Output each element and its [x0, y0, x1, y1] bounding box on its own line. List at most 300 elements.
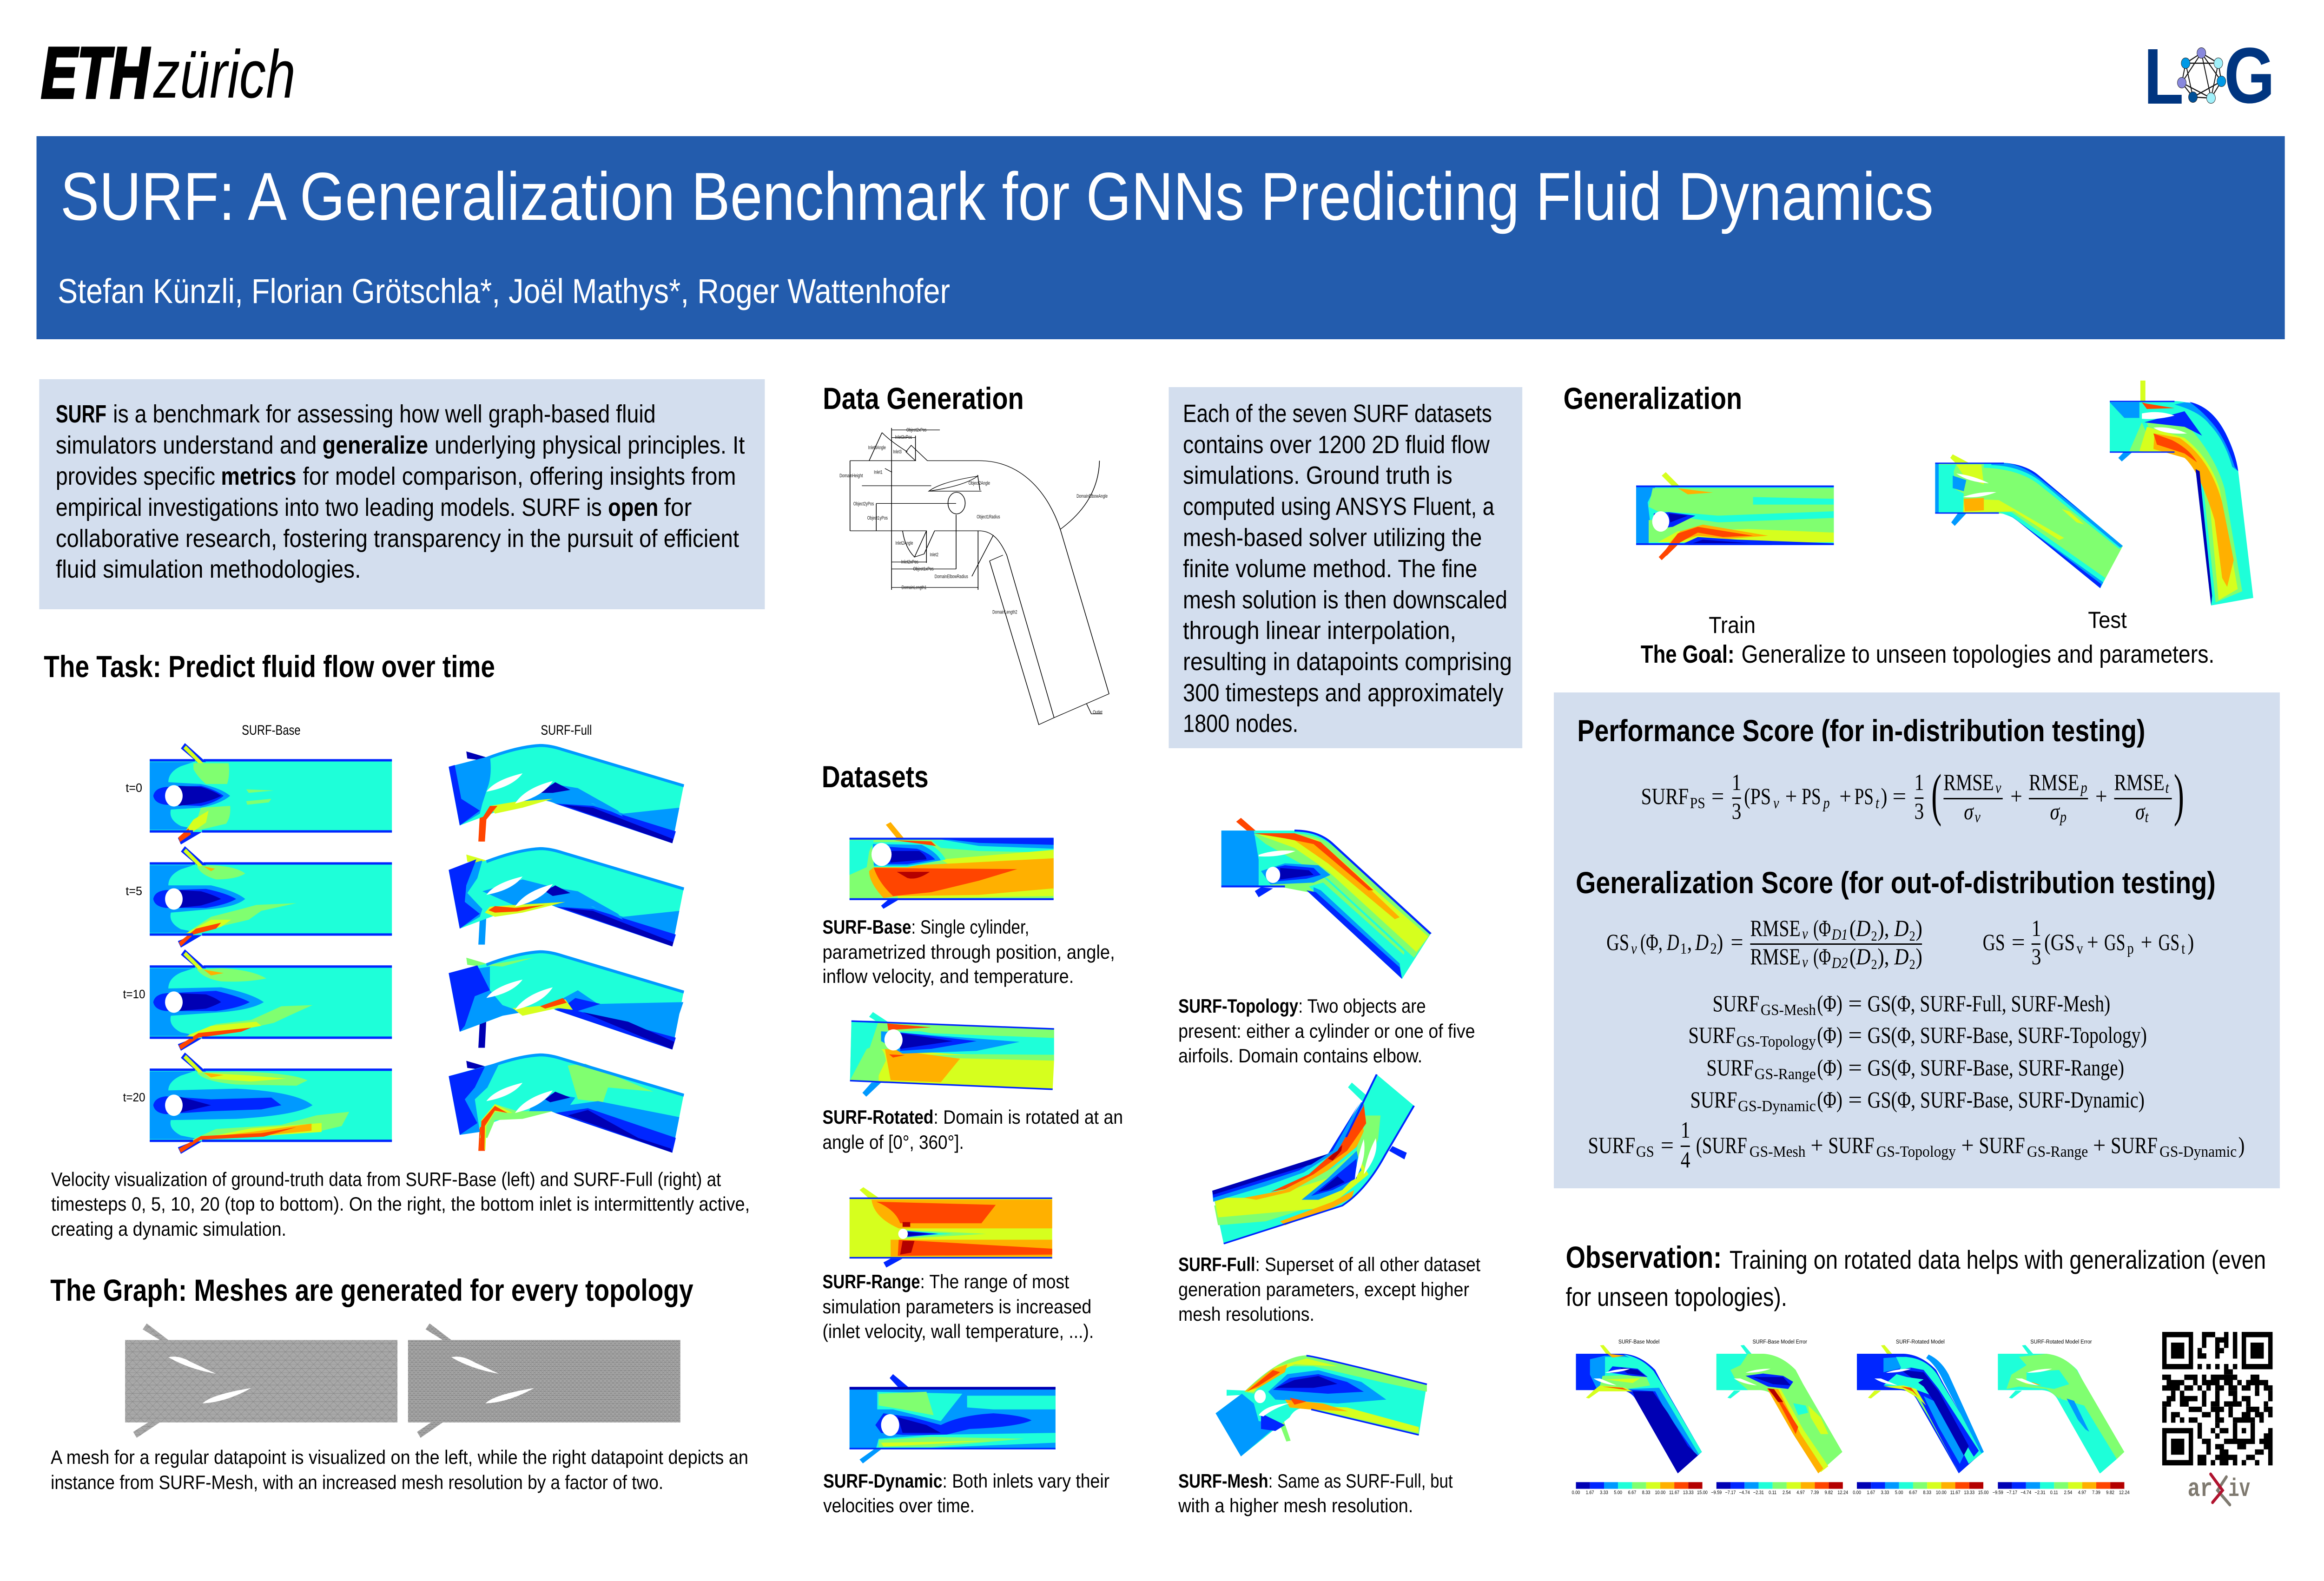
formula: GS mean	[1983, 915, 2194, 969]
formula: performance score: 3	[1732, 798, 1741, 824]
figure: observation plots: SURF-Rotated Model	[1896, 1339, 1945, 1345]
panel: dataset description: 1800 nodes.	[1183, 710, 1298, 738]
formula: GS-Topology: GS-Topology	[1736, 1032, 1816, 1050]
figure: dataset plots lower	[850, 1012, 1427, 1463]
formula: GS ratio: ,	[1687, 929, 1692, 955]
text: SURF-Base: : Single cylinder,	[911, 916, 1029, 938]
formula: performance score: t	[1875, 794, 1880, 812]
text: SURF-Mesh: SURF-Mesh	[1178, 1470, 1268, 1492]
plot: SURF-Rotated error	[1998, 1345, 2124, 1473]
formula: performance score: v	[1773, 794, 1779, 812]
formula: GS-Topology: (Φ)	[1817, 1022, 1842, 1048]
formula: performance score: RMSE	[2029, 769, 2079, 795]
text: SURF-Mesh: with a higher mesh resolution.	[1178, 1495, 1413, 1517]
figure: observation plots: 0.00	[1853, 1490, 1861, 1495]
formula: GS ratio: D2	[1831, 954, 1848, 972]
text: SURF-Mesh	[1178, 1470, 1453, 1517]
figure: observation plots: 1.67	[1586, 1490, 1594, 1495]
formula: GS mean: (GS	[2044, 929, 2075, 955]
formula: GS ratio: GS	[1606, 929, 1629, 955]
panel: introduction: for model comparison, offering insights from	[303, 462, 736, 490]
formula: SURF GS: GS-Mesh	[1750, 1142, 1806, 1160]
diagram: domain parametrization: Outlet	[1093, 709, 1103, 715]
formula: GS mean: +	[2141, 929, 2152, 955]
formula: performance score: +	[1785, 783, 1797, 809]
logo: LOG	[2144, 32, 2275, 121]
text: SURF-Topology: present: either a cylinder or one of five	[1178, 1021, 1475, 1042]
diagram: domain parametrization	[839, 427, 1109, 725]
formula: GS-Dynamic: =	[1848, 1087, 1862, 1113]
formula: GS ratio: D1	[1831, 925, 1848, 943]
formula: SURF GS: +	[1961, 1132, 1974, 1158]
formula: performance score: σ	[1964, 798, 1974, 824]
figure: observation plots: SURF-Rotated Model Error	[2030, 1339, 2092, 1345]
formula: GS ratio: D	[1695, 929, 1709, 955]
formula: GS-Topology	[1688, 1022, 2147, 1050]
formula: performance score: +	[2095, 783, 2107, 809]
diagram: domain parametrization: Object2Angle	[969, 480, 990, 486]
formula: performance score: =	[1711, 783, 1724, 809]
formula: performance score: PS	[1855, 783, 1874, 809]
figure: observation plots: 1.67	[1867, 1490, 1875, 1495]
plot: train	[1636, 472, 1834, 560]
figure: observation plots: 15.00	[1978, 1490, 1989, 1495]
diagram: domain parametrization: DomainElbowAngle	[1076, 493, 1108, 499]
panel: dataset description: Each of the seven SURF datasets	[1183, 400, 1492, 428]
label: train: Train	[1709, 612, 1756, 638]
text: SURF-Topology: SURF-Topology	[1178, 995, 1299, 1017]
text: SURF-Range	[822, 1271, 1094, 1343]
logo: arXiv: iv	[2228, 1475, 2250, 1504]
diagram: domain parametrization: Inlet1	[874, 469, 883, 475]
formula: SURF GS: +	[1810, 1132, 1823, 1158]
figure: observation plots	[1572, 1339, 2130, 1495]
figure: observation plots: 5.00	[1895, 1490, 1903, 1495]
panel: introduction: open	[608, 494, 658, 521]
formula: GS mean: )	[2187, 929, 2194, 955]
formula: performance score: PS	[1802, 783, 1821, 809]
panel: introduction: metrics	[221, 462, 297, 490]
plot: SURF-Mesh	[1215, 1355, 1427, 1456]
panel: header	[37, 136, 2285, 339]
diagram: domain parametrization: Inlet2xPos	[901, 559, 918, 565]
text: SURF-Full: SURF-Full	[1178, 1254, 1255, 1276]
diagram: domain parametrization: DomainLength2	[992, 609, 1017, 615]
plot: SURF-Base t=20	[150, 1053, 392, 1154]
formula: GS-Mesh: GS(Φ, SURF-Full, SURF-Mesh)	[1868, 990, 2110, 1016]
figure: observation plots: 13.33	[1683, 1490, 1694, 1495]
figure: task flow frames	[123, 722, 684, 1154]
plot: SURF-Base t=10	[150, 949, 392, 1051]
formula: GS ratio	[1606, 915, 1922, 972]
formula: GS-Mesh: GS-Mesh	[1761, 1001, 1816, 1019]
heading: generalization: Generalization	[1564, 381, 1742, 415]
logo: LOG: L	[2144, 33, 2184, 121]
formula: performance score: +	[1839, 783, 1851, 809]
logo: ETH Zurich	[41, 33, 296, 113]
formula: GS-Dynamic: GS-Dynamic	[1738, 1097, 1816, 1115]
figure: task flow frames: t=5	[125, 884, 142, 898]
formula: performance score: 3	[1915, 798, 1924, 824]
figure: observation plots: −7.17	[2007, 1490, 2017, 1495]
formula: GS ratio: RMSE	[1750, 915, 1801, 941]
formula: SURF GS: 4	[1681, 1146, 1690, 1173]
formula: GS-Mesh	[1712, 990, 2110, 1019]
diagram: domain parametrization: Inlet2	[930, 552, 938, 558]
formula: performance score: σ	[2135, 798, 2146, 824]
panel: introduction	[39, 379, 765, 609]
figure: task flow frames: SURF-Full	[541, 722, 592, 738]
formula: GS-Mesh: =	[1848, 990, 1862, 1016]
diagram: domain parametrization: Object1yPos	[867, 515, 888, 521]
formula: performance score: +	[2010, 783, 2022, 809]
figure: observation plots: −2.31	[1753, 1490, 1764, 1495]
formula: performance score: 1	[1915, 769, 1924, 795]
diagram: domain parametrization: Inlet2Angle	[895, 540, 913, 546]
text: SURF-Dynamic: SURF-Dynamic	[823, 1470, 942, 1492]
diagram: domain parametrization: DomainElbowRadius	[935, 573, 968, 580]
formula: performance score: RMSE	[2114, 769, 2165, 795]
heading: the task: The Task: Predict fluid flow over time	[44, 649, 495, 684]
figure: observation plots: −7.17	[1725, 1490, 1736, 1495]
formula: GS ratio: 2	[1710, 939, 1717, 957]
plot: SURF-Dynamic	[850, 1374, 1056, 1463]
text: SURF-Dynamic: : Both inlets vary their	[942, 1470, 1109, 1492]
text: the goal: The Goal:	[1641, 640, 1735, 668]
figure: observation plots: −2.31	[2035, 1490, 2046, 1495]
diagram: domain parametrization: Object2xPos	[906, 427, 926, 433]
formula: GS mean: GS	[1983, 929, 2005, 955]
heading: the graph: The Graph: Meshes are generated for every topology	[50, 1273, 693, 1307]
title: SURF: A Generalization Benchmark for GNNs Predicting Fluid Dynamics	[60, 159, 1934, 235]
formula: SURF GS: GS-Range	[2027, 1142, 2088, 1160]
figure: observation plots: 8.33	[1642, 1490, 1651, 1495]
formula: GS mean: GS	[2104, 929, 2126, 955]
formula: GS-Range	[1706, 1054, 2124, 1083]
panel: dataset description: finite volume method. The fine	[1183, 555, 1477, 583]
formula: GS ratio: D	[1666, 929, 1679, 955]
formula: performance score: t	[2166, 778, 2170, 797]
panel: dataset description: resulting in datapoints comprising	[1183, 648, 1512, 676]
logo: ETH Zurich: zürich	[153, 37, 296, 112]
formula: performance score: t	[2145, 808, 2149, 826]
heading: datasets: Datasets	[822, 759, 929, 794]
figure: observation plots: 9.82	[2106, 1490, 2114, 1495]
plot: SURF-Base	[850, 822, 1054, 909]
text: SURF-Range: simulation parameters is increased	[822, 1296, 1091, 1318]
formula: GS-Mesh: (Φ)	[1817, 990, 1842, 1016]
formula: GS mean: v	[2077, 939, 2083, 957]
formula: GS-Dynamic: SURF	[1690, 1087, 1737, 1113]
text: SURF-Rotated: angle of [0°, 360°].	[822, 1132, 964, 1153]
formula: SURF GS: GS-Topology	[1876, 1142, 1956, 1160]
heading: generalization score: Generalization Score (for out-of-distribution testing)	[1576, 865, 2216, 900]
formula: SURF GS: GS-Dynamic	[2159, 1142, 2237, 1160]
figure: observation plots: 6.67	[1909, 1490, 1917, 1495]
panel: introduction: fluid simulation methodologies.	[56, 555, 361, 583]
figure: task flow frames: t=0	[125, 781, 142, 795]
formula: GS-Mesh: SURF	[1712, 990, 1759, 1016]
text: SURF-Dynamic	[823, 1470, 1109, 1517]
plot: SURF-Topology	[1221, 818, 1431, 979]
panel: dataset description: through linear interpolation,	[1183, 617, 1456, 645]
figure: observation plots: 0.00	[1572, 1490, 1580, 1495]
plot: test 1	[1935, 455, 2123, 588]
figure: observation plots: 12.24	[1837, 1490, 1848, 1495]
figure: observation plots: 3.33	[1881, 1490, 1889, 1495]
figure: observation plots: 9.82	[1825, 1490, 1833, 1495]
figure: observation plots: 0.11	[2050, 1490, 2058, 1495]
figure: observation plots: 10.00	[1936, 1490, 1947, 1495]
plot: SURF-Base t=0	[150, 743, 392, 844]
caption: mesh: instance from SURF-Mesh, with an increased mesh resolution by a factor of two.	[51, 1472, 663, 1494]
formula: GS ratio: v	[1802, 924, 1808, 942]
figure: observation plots: 0.11	[1769, 1490, 1776, 1495]
plot: SURF-Rotated	[850, 1012, 1054, 1097]
formula: performance score: (	[1931, 763, 1941, 827]
formula: GS mean: +	[2087, 929, 2099, 955]
formula: GS-Range: (Φ)	[1817, 1054, 1842, 1080]
figure: observation plots: 6.67	[1628, 1490, 1637, 1495]
panel: introduction: is a benchmark for assessing how well graph-based fluid	[113, 400, 656, 428]
logo: ETH Zurich: ETH	[41, 33, 151, 113]
formula: GS ratio: )	[1717, 929, 1723, 955]
text: the goal: Generalize to unseen topologies and parameters.	[1741, 640, 2214, 668]
formula: SURF GS: (SURF	[1696, 1132, 1747, 1158]
colorbar: row	[1576, 1482, 2124, 1489]
formula: performance score: p	[1822, 794, 1830, 812]
diagram: domain parametrization: Object1xPos	[913, 566, 934, 572]
figure: observation plots: 2.54	[1783, 1490, 1791, 1495]
formula: performance score: PS	[1690, 794, 1705, 812]
diagram: domain parametrization: DomainLength1	[902, 585, 926, 590]
formula: performance score	[1641, 763, 2184, 827]
panel: dataset description: computed using ANSYS Fluent, a	[1183, 493, 1494, 520]
plot: SURF-Rotated model	[1857, 1345, 1984, 1473]
text: SURF-Range: : The range of most	[920, 1271, 1070, 1293]
formula: SURF GS: GS	[1636, 1142, 1654, 1160]
formula: GS-Dynamic: GS(Φ, SURF-Base, SURF-Dynamic)	[1868, 1087, 2145, 1113]
figure: observation plots: 11.67	[1669, 1490, 1679, 1495]
panel: introduction: for	[664, 494, 692, 521]
figure: observation plots: 7.39	[1810, 1490, 1819, 1495]
formula: performance score: )	[2174, 763, 2184, 827]
diagram: domain parametrization: Inlet3	[893, 449, 902, 455]
figure: dataset plots top row	[850, 818, 1431, 979]
formula: GS ratio: (Φ,	[1640, 929, 1663, 955]
formula: performance score: p	[2080, 778, 2087, 797]
text: SURF-Base: inflow velocity, and temperature.	[822, 966, 1074, 988]
figure: observation plots: −4.74	[2020, 1490, 2032, 1495]
formula: GS ratio: v	[1802, 953, 1808, 971]
figure: observation plots: −9.59	[1993, 1490, 2003, 1495]
formula: SURF GS	[1588, 1117, 2245, 1173]
formula: GS mean: =	[2012, 929, 2025, 955]
formula: GS-Range: =	[1848, 1054, 1862, 1080]
text: SURF-Rotated: SURF-Rotated	[822, 1107, 933, 1128]
caption: velocity visualization	[51, 1169, 750, 1240]
formula: GS-Range: GS-Range	[1755, 1065, 1816, 1083]
formula: performance score: )	[1881, 783, 1887, 809]
panel: introduction: underlying physical principles. It	[435, 431, 745, 459]
plot: SURF-Full t=10	[449, 950, 684, 1049]
figure: task flow frames: t=10	[123, 988, 145, 1001]
formula: SURF GS: SURF	[1979, 1132, 2025, 1158]
text: SURF-Range: (inlet velocity, wall temperature, ...).	[822, 1321, 1094, 1343]
panel: introduction: SURF	[56, 400, 106, 428]
logo: LOG: G	[2224, 32, 2275, 120]
authors: Stefan Künzli, Florian Grötschla*, Joël Mathys*, Roger Wattenhofer	[58, 273, 950, 310]
formula: GS-Range: GS(Φ, SURF-Base, SURF-Range)	[1868, 1054, 2124, 1080]
diagram: domain parametrization: Object1Radius	[977, 514, 1000, 520]
diagram: domain parametrization: Inlet3Angle	[868, 445, 886, 450]
plot: SURF-Full t=20	[449, 1054, 684, 1153]
figure: observation plots: 7.39	[2092, 1490, 2100, 1495]
figure: observation plots: −9.59	[1711, 1490, 1722, 1495]
formula: SURF GS: +	[2093, 1132, 2106, 1158]
formula: GS-Topology: SURF	[1688, 1022, 1736, 1048]
logo: arXiv: ar	[2187, 1475, 2212, 1504]
heading: performance score: Performance Score (for in-distribution testing)	[1577, 713, 2146, 748]
panel: dataset description: mesh solution is then downscaled	[1183, 586, 1507, 614]
formula: SURF GS: =	[1661, 1132, 1674, 1158]
diagram: domain parametrization: Object2yPos	[853, 501, 874, 507]
figure: observation plots: 10.00	[1655, 1490, 1666, 1495]
text: SURF-Topology: : Two objects are	[1298, 995, 1426, 1017]
figure: observation plots: 12.24	[2119, 1490, 2130, 1495]
formula: SURF GS: SURF	[1588, 1132, 1635, 1158]
plot: SURF-Base error	[1717, 1345, 1842, 1473]
text: SURF-Full: : Superset of all other dataset	[1255, 1254, 1480, 1276]
figure: observation plots: 5.00	[1614, 1490, 1622, 1495]
panel: introduction: provides specific	[56, 462, 215, 490]
mesh: regular	[125, 1324, 397, 1438]
text: observation	[1566, 1240, 2266, 1311]
heading: data generation: Data Generation	[823, 381, 1024, 415]
formula: GS ratio: =	[1730, 929, 1743, 955]
text: SURF-Base: SURF-Base	[822, 916, 911, 938]
text: observation: Observation:	[1566, 1240, 1722, 1274]
text: SURF-Range: SURF-Range	[822, 1271, 920, 1293]
formula: GS ratio: v	[1631, 939, 1637, 957]
formula: performance score: (PS	[1744, 783, 1771, 809]
figure: meshes	[125, 1324, 680, 1438]
formula: performance score: SURF	[1641, 783, 1689, 809]
figure: task flow frames: SURF-Base	[242, 722, 301, 738]
formula: performance score: σ	[2050, 798, 2060, 824]
formula: performance score: v	[1974, 808, 1981, 826]
text: SURF-Topology	[1178, 995, 1475, 1067]
figure: observation plots: SURF-Base Model	[1618, 1339, 1659, 1345]
figure: observation plots: −4.74	[1739, 1490, 1750, 1495]
formula: GS-Topology: GS(Φ, SURF-Base, SURF-Topology)	[1868, 1022, 2147, 1048]
panel: scores	[1554, 692, 2280, 1188]
figure: observation plots: 4.97	[1796, 1490, 1805, 1495]
formula: GS mean: 3	[2032, 943, 2041, 969]
figure: observation plots: 8.33	[1923, 1490, 1931, 1495]
text: SURF-Full	[1178, 1254, 1480, 1325]
diagram: domain parametrization: Inlet3xPos	[895, 434, 912, 440]
formula: performance score: 1	[1732, 769, 1741, 795]
text: SURF-Rotated	[822, 1107, 1123, 1153]
formula: SURF GS: 1	[1681, 1117, 1690, 1143]
panel: dataset description: 300 timesteps and approximately	[1183, 679, 1504, 707]
formula: SURF GS: SURF	[1828, 1132, 1875, 1158]
panel: dataset description: mesh-based solver utilizing the	[1183, 524, 1482, 552]
plot: SURF-Full	[1212, 1074, 1414, 1244]
text: SURF-Mesh: : Same as SURF-Full, but	[1268, 1470, 1453, 1492]
formula: GS mean: 1	[2032, 915, 2041, 941]
formula: GS ratio: (D₂), D₂)	[1849, 915, 1922, 941]
caption: velocity visualization: creating a dynamic simulation.	[51, 1219, 286, 1240]
formula: GS-Dynamic	[1690, 1087, 2145, 1115]
text: SURF-Rotated: : Domain is rotated at an	[933, 1107, 1123, 1128]
text: SURF-Full: generation parameters, except higher	[1178, 1279, 1469, 1301]
formula: GS ratio: 1	[1680, 939, 1687, 957]
caption: mesh	[51, 1447, 748, 1494]
text: SURF-Base	[822, 916, 1115, 988]
formula: GS-Topology: =	[1848, 1022, 1862, 1048]
figure: observation plots: 11.67	[1950, 1490, 1961, 1495]
plot: test 2	[2110, 381, 2253, 606]
figure: observation plots: 13.33	[1964, 1490, 1975, 1495]
formula: GS-Dynamic: (Φ)	[1817, 1087, 1842, 1113]
formula: performance score: =	[1892, 783, 1906, 809]
formula: GS ratio: (D₂), D₂)	[1849, 943, 1922, 969]
text: SURF-Dynamic: velocities over time.	[823, 1495, 975, 1517]
figure: observation plots: 15.00	[1697, 1490, 1708, 1495]
text: SURF-Full: mesh resolutions.	[1178, 1304, 1314, 1325]
plot: SURF-Base model	[1576, 1345, 1702, 1473]
plot: SURF-Full t=5	[449, 847, 684, 946]
figure: observation plots: 2.54	[2064, 1490, 2073, 1495]
plot: SURF-Base t=5	[150, 846, 392, 948]
text: observation: Training on rotated data helps with generalization (even	[1730, 1245, 2266, 1274]
panel: dataset description	[1169, 387, 1522, 748]
figure: observation plots: 3.33	[1600, 1490, 1608, 1495]
formula: GS-Range: SURF	[1706, 1054, 1754, 1080]
text: SURF-Topology: airfoils. Domain contains elbow.	[1178, 1045, 1422, 1067]
panel: introduction: empirical investigations into two leading models. SURF is	[56, 494, 602, 521]
figure: observation plots: SURF-Base Model Error	[1752, 1339, 1807, 1345]
mesh: SURF-Mesh	[408, 1324, 680, 1438]
caption: velocity visualization: timesteps 0, 5, 10, 20 (top to bottom). On the right, the bottom inlet is intermittently active,	[51, 1193, 750, 1215]
formula: SURF GS: SURF	[2111, 1132, 2158, 1158]
formula: performance score: v	[1995, 778, 2001, 797]
figure: task flow frames: t=20	[123, 1091, 145, 1105]
caption: velocity visualization: Velocity visualization of ground-truth data from SURF-Base (left) and SURF-Full (right) at	[51, 1169, 721, 1191]
panel: introduction: generalize	[323, 431, 428, 459]
plot: SURF-Range	[850, 1187, 1052, 1268]
qr code	[2162, 1332, 2272, 1465]
panel: dataset description: simulations. Ground truth is	[1183, 461, 1452, 489]
figure: generalization plots	[1636, 381, 2253, 606]
formula: SURF GS: )	[2238, 1132, 2245, 1158]
plot: SURF-Full t=0	[449, 744, 684, 843]
text: SURF-Base: parametrized through position, angle,	[822, 942, 1115, 963]
formula: GS ratio: (Φ	[1813, 943, 1831, 969]
formula: GS mean: p	[2127, 939, 2134, 957]
formula: performance score: RMSE	[1943, 769, 1994, 795]
text: observation: for unseen topologies).	[1566, 1282, 1787, 1311]
label: test: Test	[2088, 606, 2127, 633]
formula: GS ratio: RMSE	[1750, 943, 1801, 969]
diagram: domain parametrization: DomainHeight	[839, 473, 863, 479]
panel: dataset description: contains over 1200 2D fluid flow	[1183, 431, 1490, 459]
figure: observation plots: 4.97	[2078, 1490, 2086, 1495]
caption: mesh: A mesh for a regular datapoint is visualized on the left, while the right datapoint depicts an	[51, 1447, 748, 1469]
formula: GS ratio: (Φ	[1813, 915, 1831, 941]
